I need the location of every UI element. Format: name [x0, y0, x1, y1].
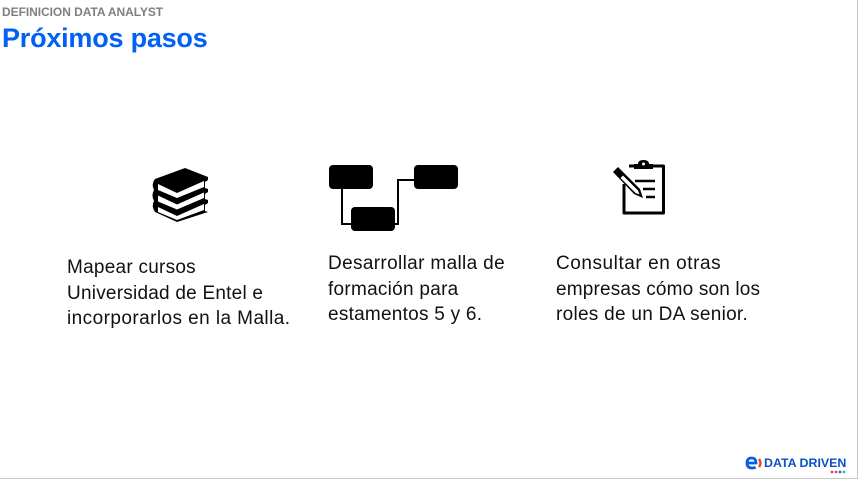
text: desarrollar malla: estamentos 5 y 6. — [328, 304, 482, 325]
logo mark — [746, 456, 762, 470]
icon: clipboard with pencil — [613, 160, 665, 214]
title: Próximos pasos — [2, 23, 208, 53]
section label: DEFINICION DATA ANALYST — [2, 5, 163, 19]
text: consultar en otras empresas: roles de un DA senior. — [556, 304, 748, 325]
text: mapear cursos: Universidad de Entel e — [67, 282, 263, 304]
logo text: DATA DRIVEN — [764, 456, 846, 470]
text: desarrollar malla: formación para — [328, 278, 459, 300]
text: consultar en otras empresas — [556, 253, 760, 325]
text: consultar en otras empresas: Consultar en otras — [556, 253, 721, 274]
logo dots — [830, 470, 846, 474]
text: desarrollar malla: Desarrollar malla de — [328, 253, 505, 274]
icon: process flow boxes — [329, 165, 458, 231]
icon: stack of books — [152, 168, 208, 222]
logo: data driven — [746, 456, 846, 474]
text: mapear cursos — [67, 257, 290, 329]
text: desarrollar malla — [328, 253, 505, 325]
text: mapear cursos: incorporarlos en la Malla. — [67, 308, 290, 329]
text: mapear cursos: Mapear cursos — [67, 257, 196, 278]
text: consultar en otras empresas: empresas cómo son los — [556, 278, 760, 300]
